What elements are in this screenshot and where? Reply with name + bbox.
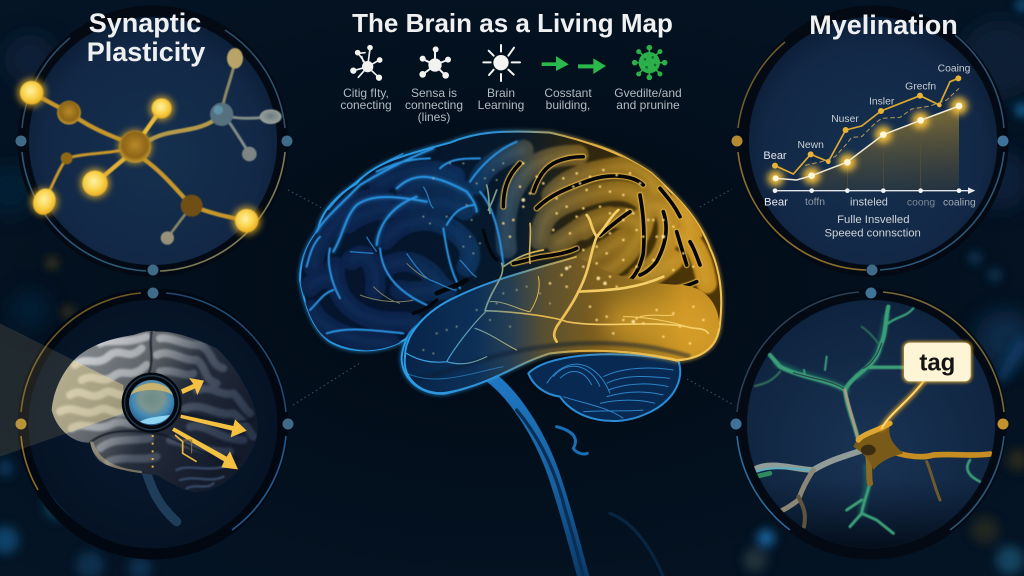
icon: lens [122,373,182,433]
label: sun: Brain [487,86,515,100]
label: network 2: Sensa is [411,86,457,100]
label: green arrows: building, [546,98,590,112]
chart labels: insteled [850,196,888,208]
chart labels: coaling [943,197,976,208]
grey brain [52,331,258,492]
label: green cell: Gvedilte/and [614,86,682,100]
arrows from lens [172,378,247,469]
label: green cell: and prunine [616,98,680,112]
line chart [763,64,976,239]
cerebrum glow [300,132,721,394]
icon row [340,45,682,124]
chart labels: Coaing [938,64,971,75]
gyri [310,150,707,343]
label: green arrows: Cosstant [544,86,592,100]
heading: myelination: Myelination [809,10,958,40]
brain stem [147,473,177,522]
cerebrum silhouette [300,132,721,394]
sulci blue lines [307,142,517,338]
temporal lobe [403,257,719,393]
soma [853,423,903,470]
ring: myelination [732,11,1008,276]
chart labels: toffn [805,197,825,208]
chart area fill [812,106,959,190]
label: network 2: connecting [405,98,463,112]
glowing axon to tag [882,382,923,428]
chart labels: Insler [869,96,895,107]
white series [775,106,959,180]
label: sun: Learning [478,98,524,112]
green glow [777,317,887,513]
icon: network 2 [420,47,450,78]
heading: synaptic plasticity: Plasticity [87,37,205,67]
connector: dotted lines [288,189,732,405]
grey-white core [845,390,858,440]
ring: synaptic plasticity [16,11,292,276]
circuit trace [175,435,197,462]
panel: neuron with tag [730,288,1008,554]
veins [407,185,708,364]
label: network 1: conecting [340,98,392,112]
heading: title: The Brain as a Living Map [352,8,673,38]
panel: myelination [732,10,1008,276]
light beam [0,323,123,457]
chart labels: coong [907,197,935,208]
gold thin veins [360,263,427,303]
dotted line [150,435,156,473]
neuron [753,307,990,533]
icon: green cell [633,46,667,79]
sulci gold [503,157,700,288]
neuron network [18,48,282,245]
axis [775,189,971,193]
chart labels [763,64,976,239]
chart labels: Bear [763,150,787,162]
chart labels: Newn [797,140,824,151]
center brain [300,132,721,576]
beam tint on brain [52,360,124,434]
ring: neuron panel [730,288,1008,554]
chart labels: Bear [764,196,788,208]
illustration: grey brain with lens [0,323,258,522]
icon: sun [483,45,520,81]
heading: synaptic plasticity: Synaptic [89,8,201,38]
chart labels: Fulle Insvelled [837,214,910,226]
callout: tag [903,341,972,383]
icon: network 1 [351,46,382,80]
callout: tag: tag [919,350,955,377]
cerebellum [528,354,680,421]
dotted series [805,88,959,165]
chart labels: Grecfn [905,81,936,92]
glow points [768,97,968,186]
cream lower edge [92,443,140,473]
brain stem [490,377,663,576]
gold branches [868,447,990,500]
panel: lens on brain [0,288,294,554]
blue veins [350,187,477,290]
speckles [423,163,703,353]
label: network 2: (lines) [418,110,450,124]
chart labels: Nuser [831,114,859,125]
label: network 1: Citig fIty, [343,86,389,100]
ring: lens panel [16,288,294,554]
dark sulci [413,230,497,313]
chart labels: Speeed connsction [824,227,921,239]
icon: green arrows [542,56,606,74]
panel: synaptic plasticity [16,8,292,276]
dark core [793,343,882,388]
green branches [755,307,980,533]
gold series [775,78,958,174]
